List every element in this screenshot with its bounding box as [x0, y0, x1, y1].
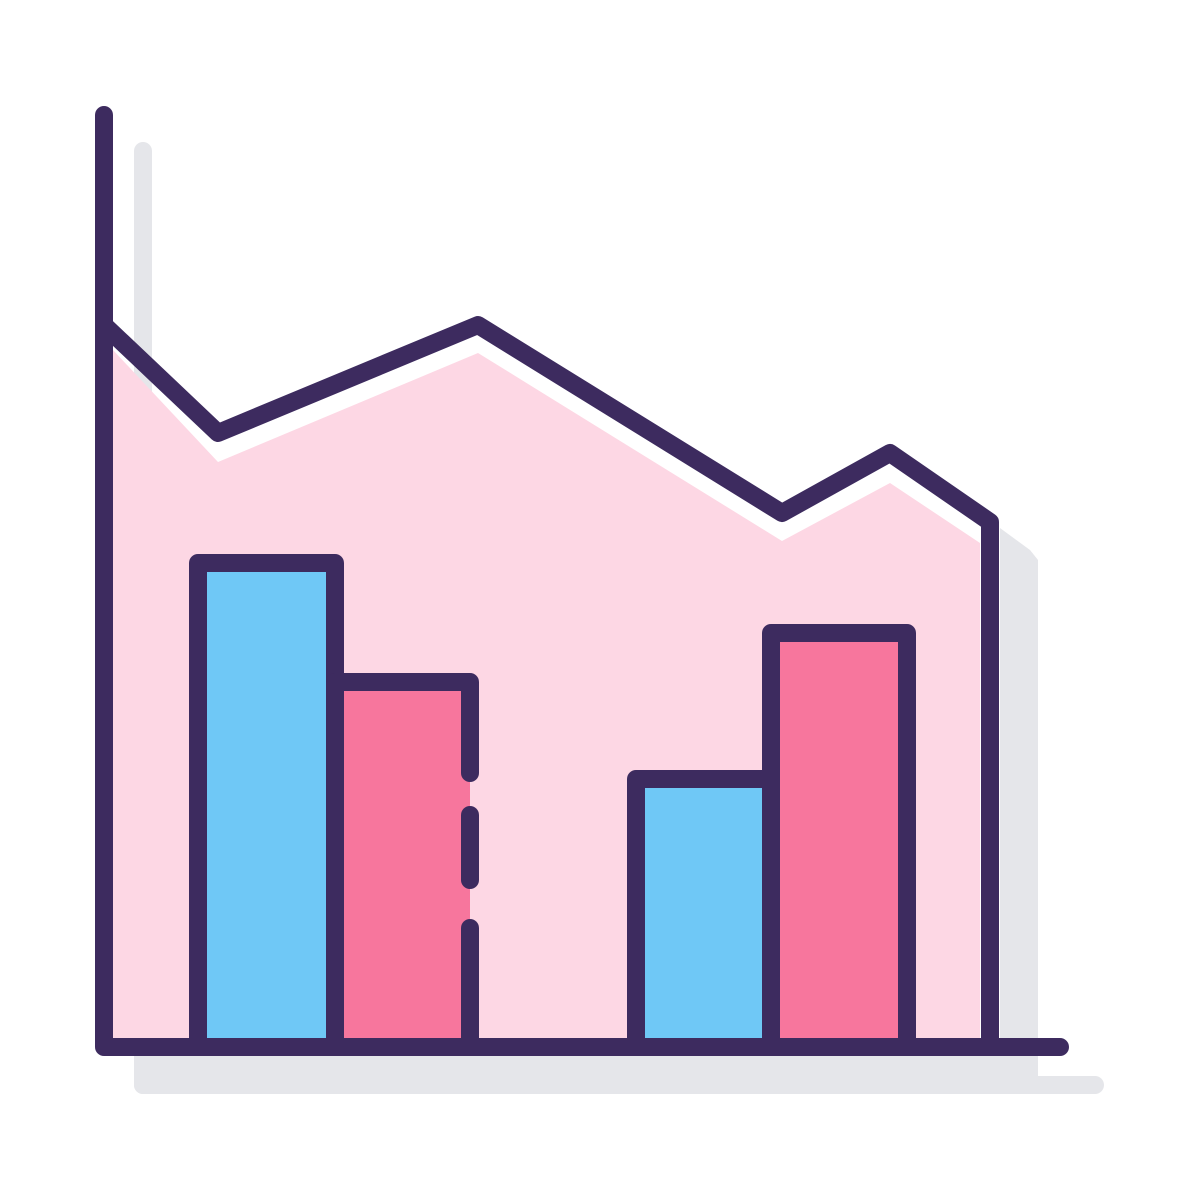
- area fill: [113, 350, 980, 1040]
- bar: blue left: [198, 563, 335, 1047]
- trend line: [104, 325, 990, 1047]
- bar: blue right: [636, 779, 771, 1047]
- bar: pink left: [335, 682, 470, 1047]
- axes: [104, 115, 1060, 1047]
- bar: pink right: [771, 633, 907, 1047]
- shadow: [134, 142, 1104, 1094]
